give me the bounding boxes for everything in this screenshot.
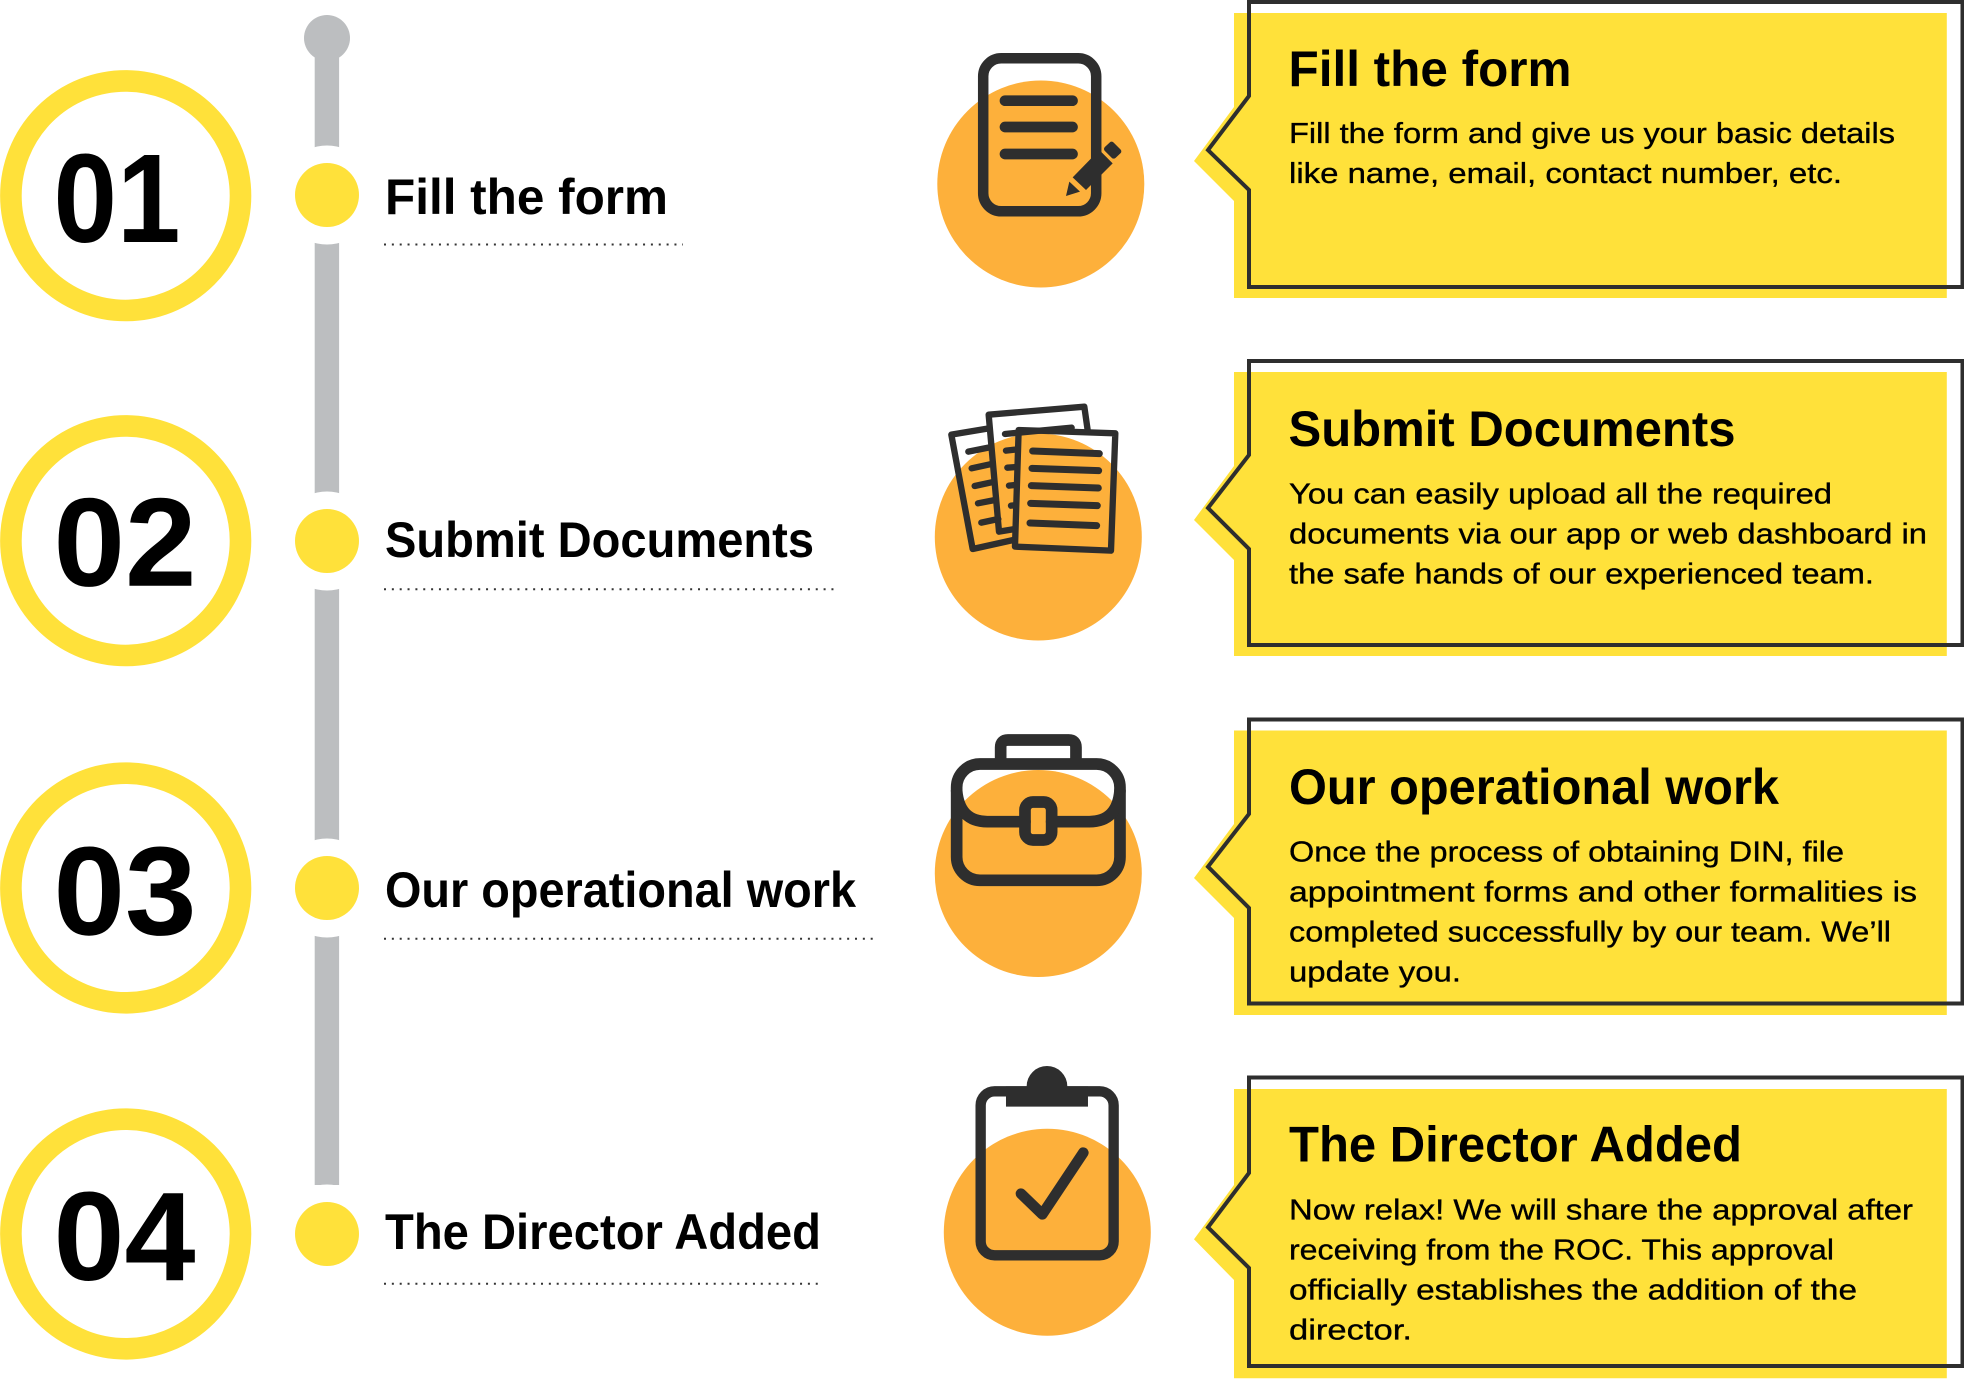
- panel: the director added: Now relax! We will share the approval after: [1289, 1194, 1913, 1226]
- panel: our operational work: update you.: [1289, 957, 1461, 989]
- panel: the director added: receiving from the ROC. This approval: [1289, 1234, 1834, 1266]
- step 2 label: Submit Documents: [385, 512, 814, 568]
- vertical timeline: [278, 15, 376, 1284]
- icon: form with pencil: [937, 58, 1144, 287]
- step 1 number badge: [11, 81, 240, 310]
- step 4 number badge: 04: [54, 1166, 196, 1307]
- panel: submit documents: [1194, 361, 1962, 656]
- panel: fill the form: Fill the form and give us your basic details: [1289, 118, 1895, 150]
- panel: submit documents: Submit Documents: [1288, 401, 1736, 457]
- step 3 number badge: [11, 773, 240, 1003]
- panel: our operational work: Once the process of obtaining DIN, file: [1289, 837, 1844, 869]
- panel: our operational work: completed successfully by our team. We’ll: [1289, 917, 1891, 949]
- panel: submit documents: documents via our app or web dashboard in: [1289, 518, 1927, 550]
- icon: clipboard with check: [944, 1066, 1151, 1336]
- panel: the director added: [1194, 1078, 1962, 1378]
- step 1 label: Fill the form: [385, 169, 668, 225]
- icon: briefcase: [935, 740, 1142, 977]
- panel: the director added: director.: [1289, 1314, 1412, 1346]
- panel: the director added: The Director Added: [1289, 1117, 1742, 1173]
- panel: our operational work: Our operational work: [1289, 759, 1779, 815]
- panel: our operational work: appointment forms and other formalities is: [1289, 877, 1917, 909]
- step 1 number badge: 01: [54, 128, 180, 269]
- panel: fill the form: like name, email, contact number, etc.: [1289, 158, 1842, 190]
- step 3 number badge: 03: [54, 820, 196, 962]
- step 2 number badge: 02: [54, 472, 196, 613]
- panel: the director added: officially establishes the addition of the: [1289, 1274, 1857, 1306]
- panel: our operational work: [1194, 720, 1962, 1015]
- panel: submit documents: the safe hands of our experienced team.: [1289, 558, 1874, 590]
- step 3 label: Our operational work: [385, 862, 856, 918]
- panel: fill the form: [1194, 2, 1962, 298]
- step 2 number badge: [11, 426, 240, 656]
- step 4 number badge: [11, 1119, 240, 1349]
- icon: documents: [935, 407, 1142, 640]
- panel: submit documents: You can easily upload all the required: [1289, 478, 1832, 510]
- step 4 label: The Director Added: [385, 1204, 821, 1260]
- panel: fill the form: Fill the form: [1288, 41, 1572, 97]
